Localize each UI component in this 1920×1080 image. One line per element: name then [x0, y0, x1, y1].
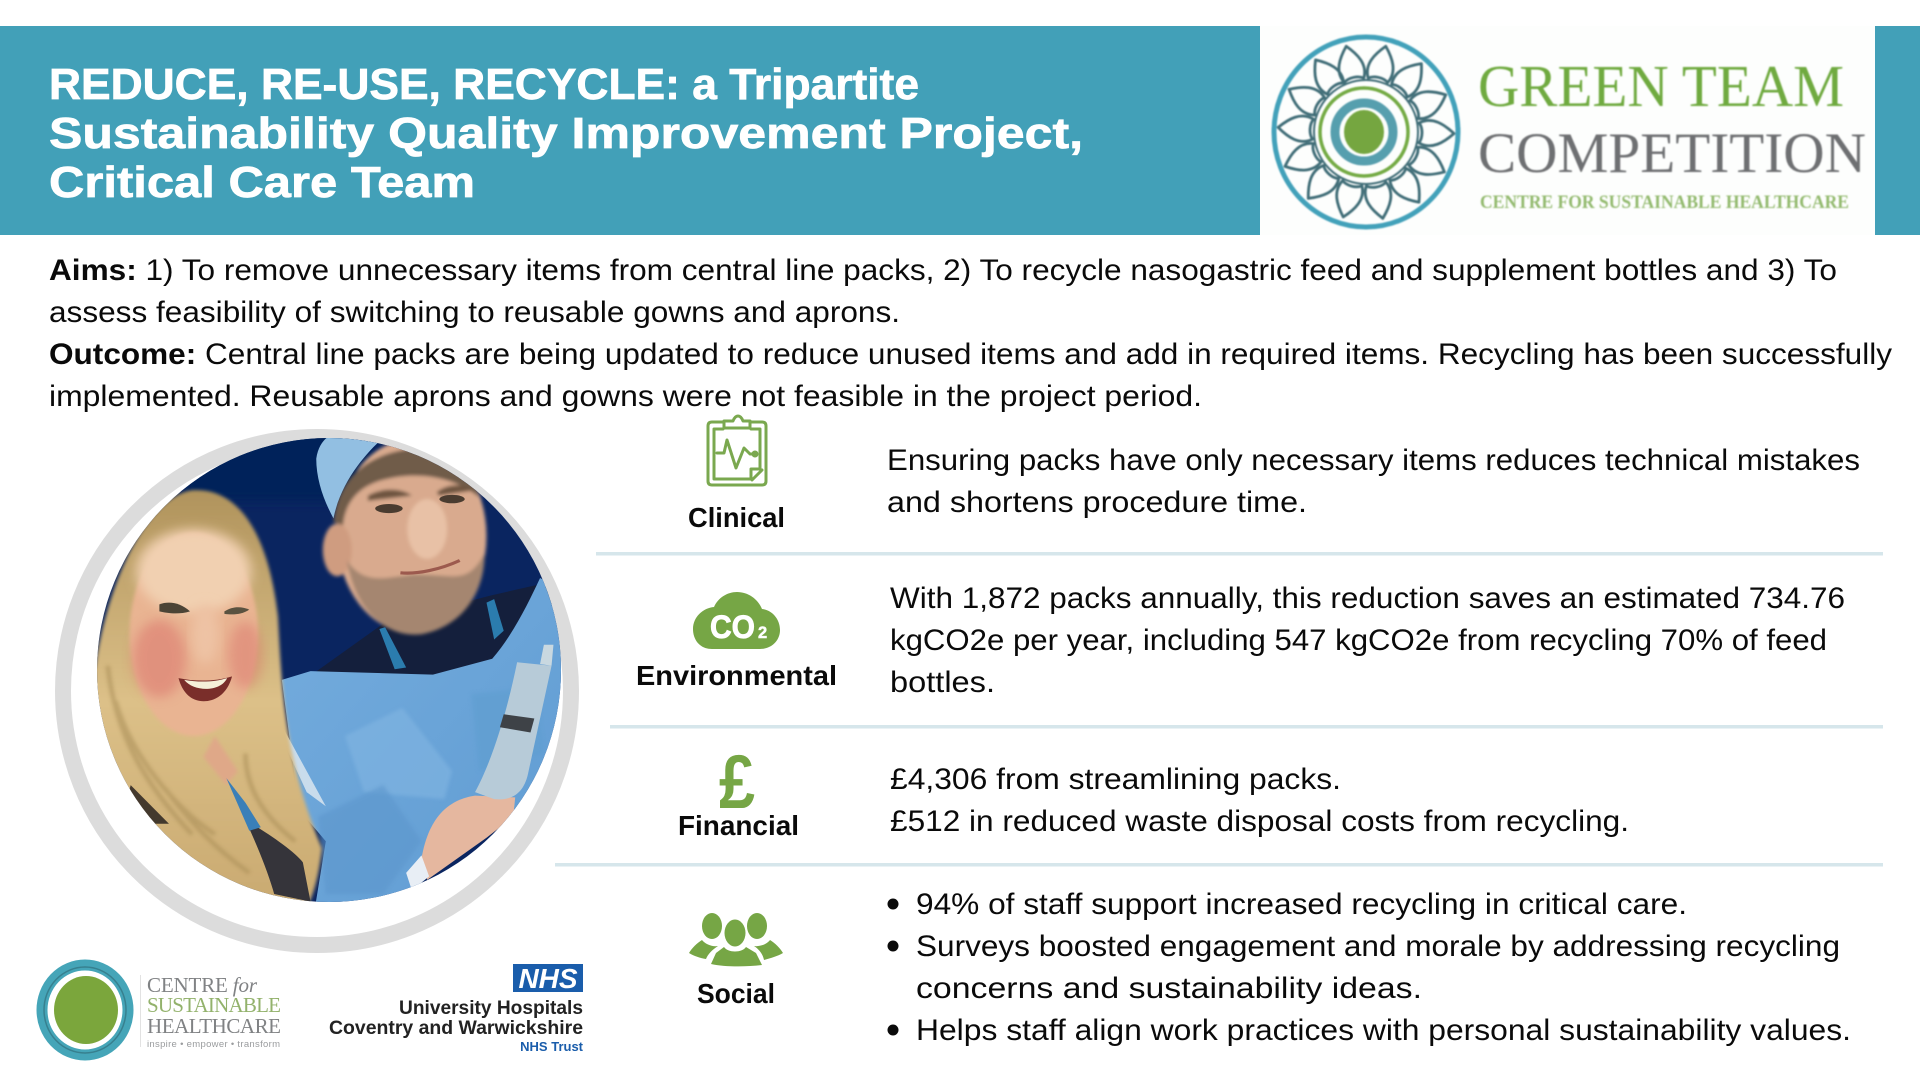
logo: Centre for Sustainable Healthcare	[42, 965, 281, 1055]
logo text: GREEN TEAM	[1478, 53, 1844, 119]
aims and outcome text: Aims: 1) To remove unnecessary items from central line packs, 2) To recycle nasogastric feed and supplement bottles and 3) To	[49, 254, 1837, 287]
aims and outcome text	[49, 254, 1892, 413]
environmental text: bottles.	[890, 666, 995, 699]
clinical row	[688, 416, 1860, 533]
label: social: Social	[697, 978, 775, 1009]
icon: CO2 cloud	[693, 592, 780, 649]
icon: clipboard with heartbeat	[708, 416, 766, 485]
environmental text: kgCO2e per year, including 547 kgCO2e from recycling 70% of feed	[890, 624, 1827, 657]
title: REDUCE, RE-USE, RECYCLE: a Tripartite	[49, 60, 919, 109]
financial text: £512 in reduced waste disposal costs from recycling.	[890, 805, 1629, 838]
social bullet list: 94% of staff support increased recycling in critical care.	[916, 888, 1687, 921]
logo: Centre for Sustainable Healthcare: HEALTHCARE	[147, 1014, 281, 1038]
photo ring	[63, 437, 571, 945]
logo: Green Team Competition	[1260, 26, 1875, 235]
woman	[92, 490, 322, 912]
title: Sustainability Quality Improvement Project,	[49, 109, 1083, 158]
social bullet list: concerns and sustainability ideas.	[916, 972, 1422, 1005]
logo: NHS University Hospitals: NHS Trust	[520, 1039, 584, 1054]
logo: NHS University Hospitals: University Hospitals	[399, 997, 583, 1019]
logo: Centre for Sustainable Healthcare: SUSTAINABLE	[147, 993, 281, 1017]
financial text: £4,306 from streamlining packs.	[890, 763, 1341, 796]
aims and outcome text: assess feasibility of switching to reusable gowns and aprons.	[49, 296, 900, 329]
logo text	[1478, 53, 1866, 213]
icon: CO2 cloud: CO	[710, 609, 755, 645]
logo: Centre for Sustainable Healthcare: CENTRE for	[147, 973, 258, 997]
aims and outcome text: implemented. Reusable aprons and gowns were not feasible in the project period.	[49, 380, 1202, 413]
social row	[689, 888, 1851, 1047]
hand and syringe	[406, 645, 553, 890]
label: environmental: Environmental	[636, 660, 837, 691]
clinical text: Ensuring packs have only necessary items reduces technical mistakes	[887, 444, 1860, 477]
financial row	[678, 740, 1629, 841]
header banner	[0, 26, 1920, 235]
logo emblem: sun mandala	[1274, 37, 1458, 227]
label: financial: Financial	[678, 810, 799, 841]
gown	[282, 578, 575, 912]
environmental text: With 1,872 packs annually, this reduction saves an estimated 734.76	[890, 582, 1845, 615]
logo text: COMPETITION	[1478, 122, 1866, 185]
logo: NHS University Hospitals: Coventry and Warwickshire	[329, 1017, 583, 1039]
label: clinical: Clinical	[688, 502, 785, 533]
logo text: CENTRE FOR SUSTAINABLE HEALTHCARE	[1480, 193, 1849, 213]
clinical text	[887, 444, 1860, 519]
social bullet list: Helps staff align work practices with personal sustainability values.	[916, 1014, 1851, 1047]
social bullet list: Surveys boosted engagement and morale by addressing recycling	[916, 930, 1840, 963]
logo: NHS University Hospitals: NHS	[518, 963, 578, 994]
clinical text: and shortens procedure time.	[887, 486, 1307, 519]
icon: CO2 cloud: 2	[758, 624, 767, 642]
icon: pound sign: £	[719, 740, 755, 825]
aims and outcome text: Outcome: Central line packs are being updated to reduce unused items and add in required items. Recycling has been successfully	[49, 338, 1892, 371]
logo: NHS University Hospitals	[329, 963, 584, 1054]
icon: group of people	[689, 913, 783, 966]
title: Critical Care Team	[49, 158, 475, 207]
man	[314, 436, 567, 676]
environmental text	[890, 582, 1845, 699]
social bullet list	[888, 888, 1851, 1047]
financial text	[890, 763, 1629, 838]
environmental row	[636, 582, 1845, 699]
title	[49, 60, 1083, 207]
logo: Centre for Sustainable Healthcare: inspire • empower • transform	[147, 1039, 280, 1050]
team photo	[92, 431, 575, 912]
